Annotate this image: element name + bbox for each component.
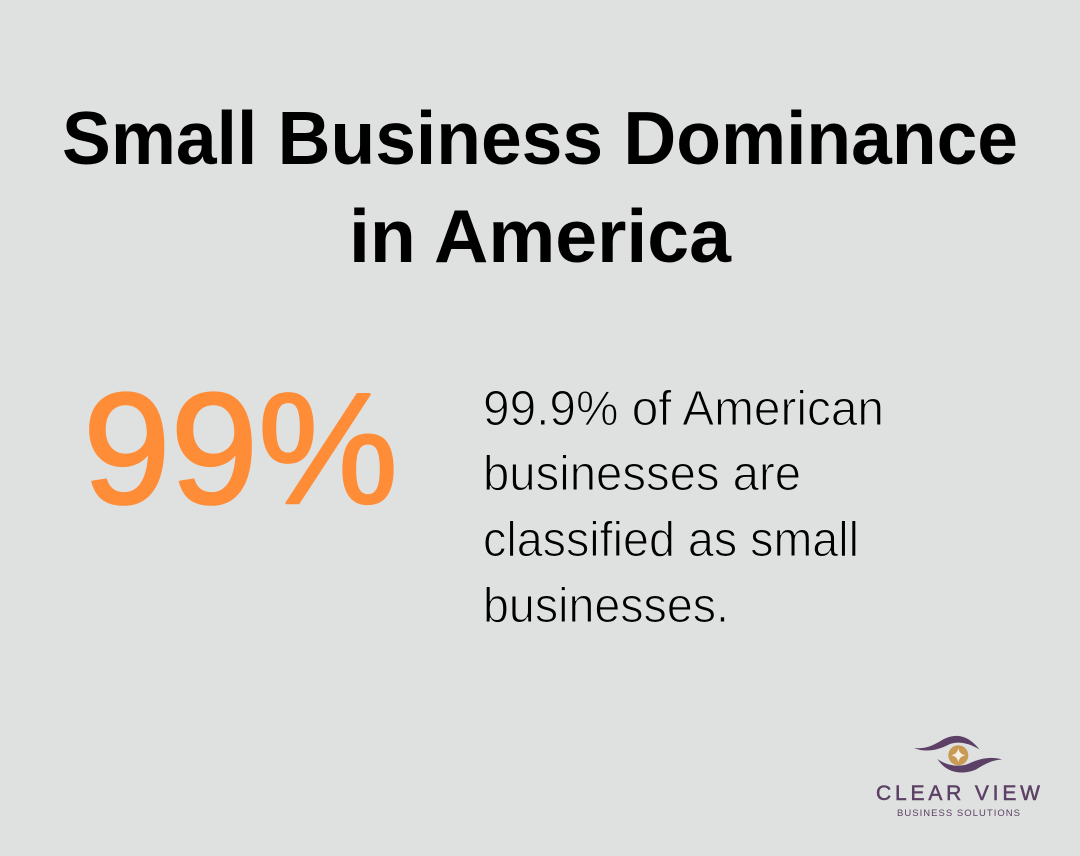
title [62, 96, 1018, 278]
description text: classified as small [483, 513, 859, 567]
logo wordmark: CLEAR VIEW [876, 782, 1040, 805]
title: in America [349, 194, 732, 278]
icon: eye upper swoosh [914, 736, 980, 751]
logo tagline: BUSINESS SOLUTIONS [897, 808, 1020, 819]
description text: businesses are [483, 447, 801, 501]
title: Small Business Dominance [62, 96, 1018, 180]
description text: 99.9% of American [483, 382, 884, 436]
logo: Clear View Business Solutions [876, 736, 1040, 819]
icon: eye lower swoosh [938, 758, 1002, 773]
description text: businesses. [483, 579, 729, 633]
icon: gold circle with star [948, 745, 968, 765]
big statistic: 99%: 99% [83, 361, 398, 537]
description text [483, 382, 884, 633]
